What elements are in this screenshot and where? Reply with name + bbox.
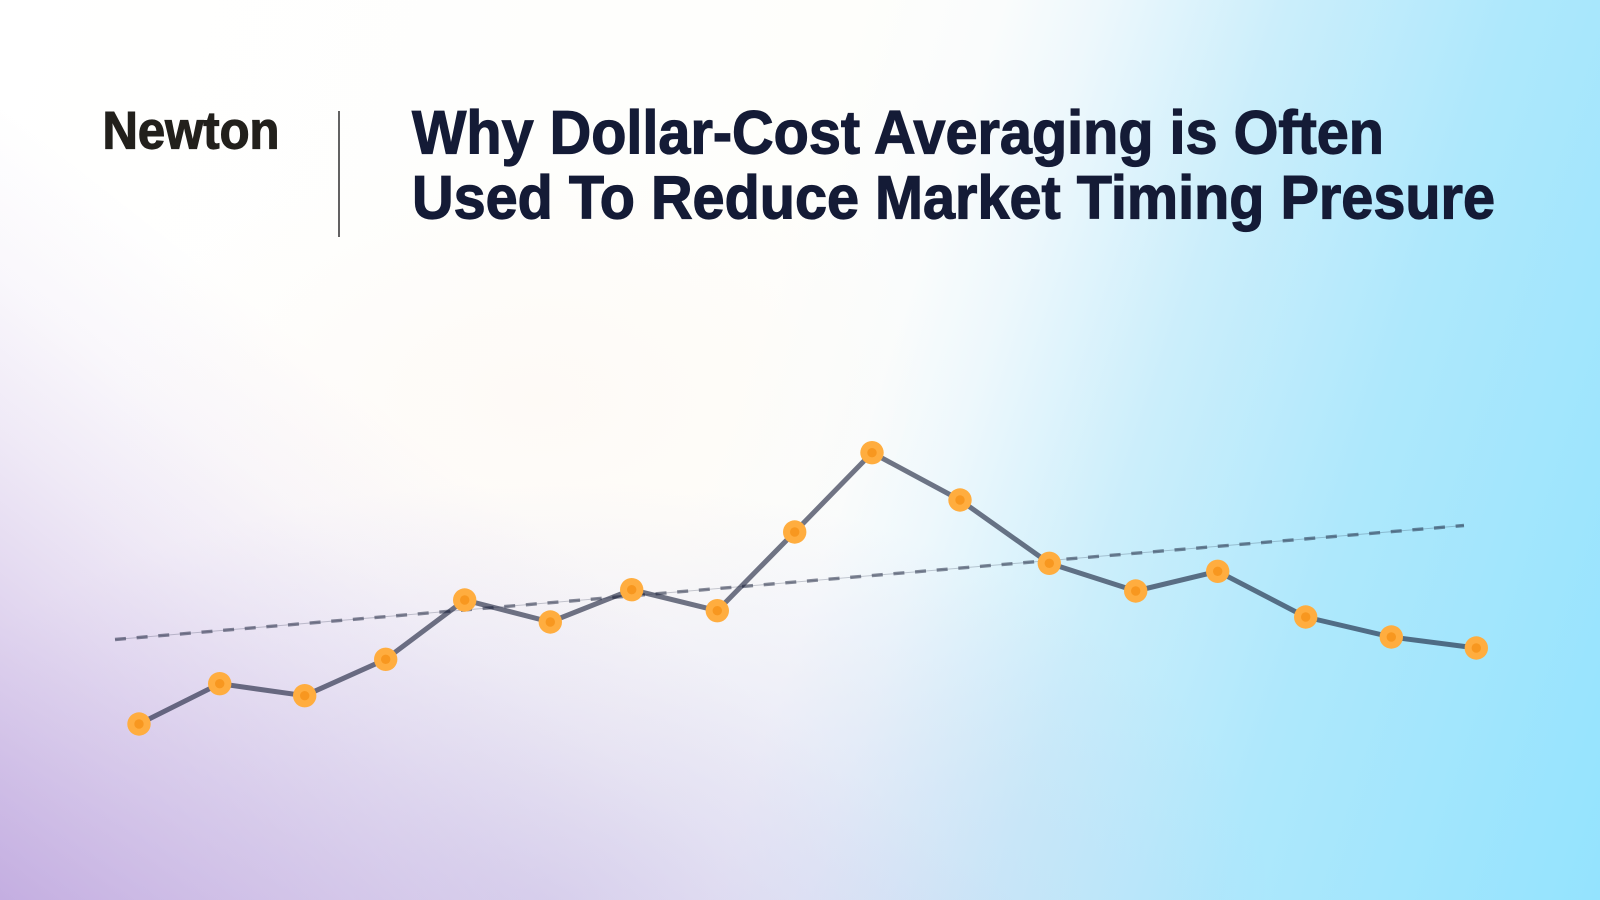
logo: Newton: Newton	[102, 102, 280, 161]
title	[412, 99, 1495, 232]
title: Why Dollar-Cost Averaging is Often	[412, 99, 1384, 167]
line chart	[115, 441, 1488, 736]
title: Used To Reduce Market Timing Presure	[412, 164, 1495, 232]
data points: marker centres	[134, 448, 1481, 729]
data points: orange markers	[127, 441, 1488, 736]
trend line: dashed average	[115, 526, 1464, 640]
header divider	[338, 111, 340, 237]
price line	[139, 453, 1476, 724]
